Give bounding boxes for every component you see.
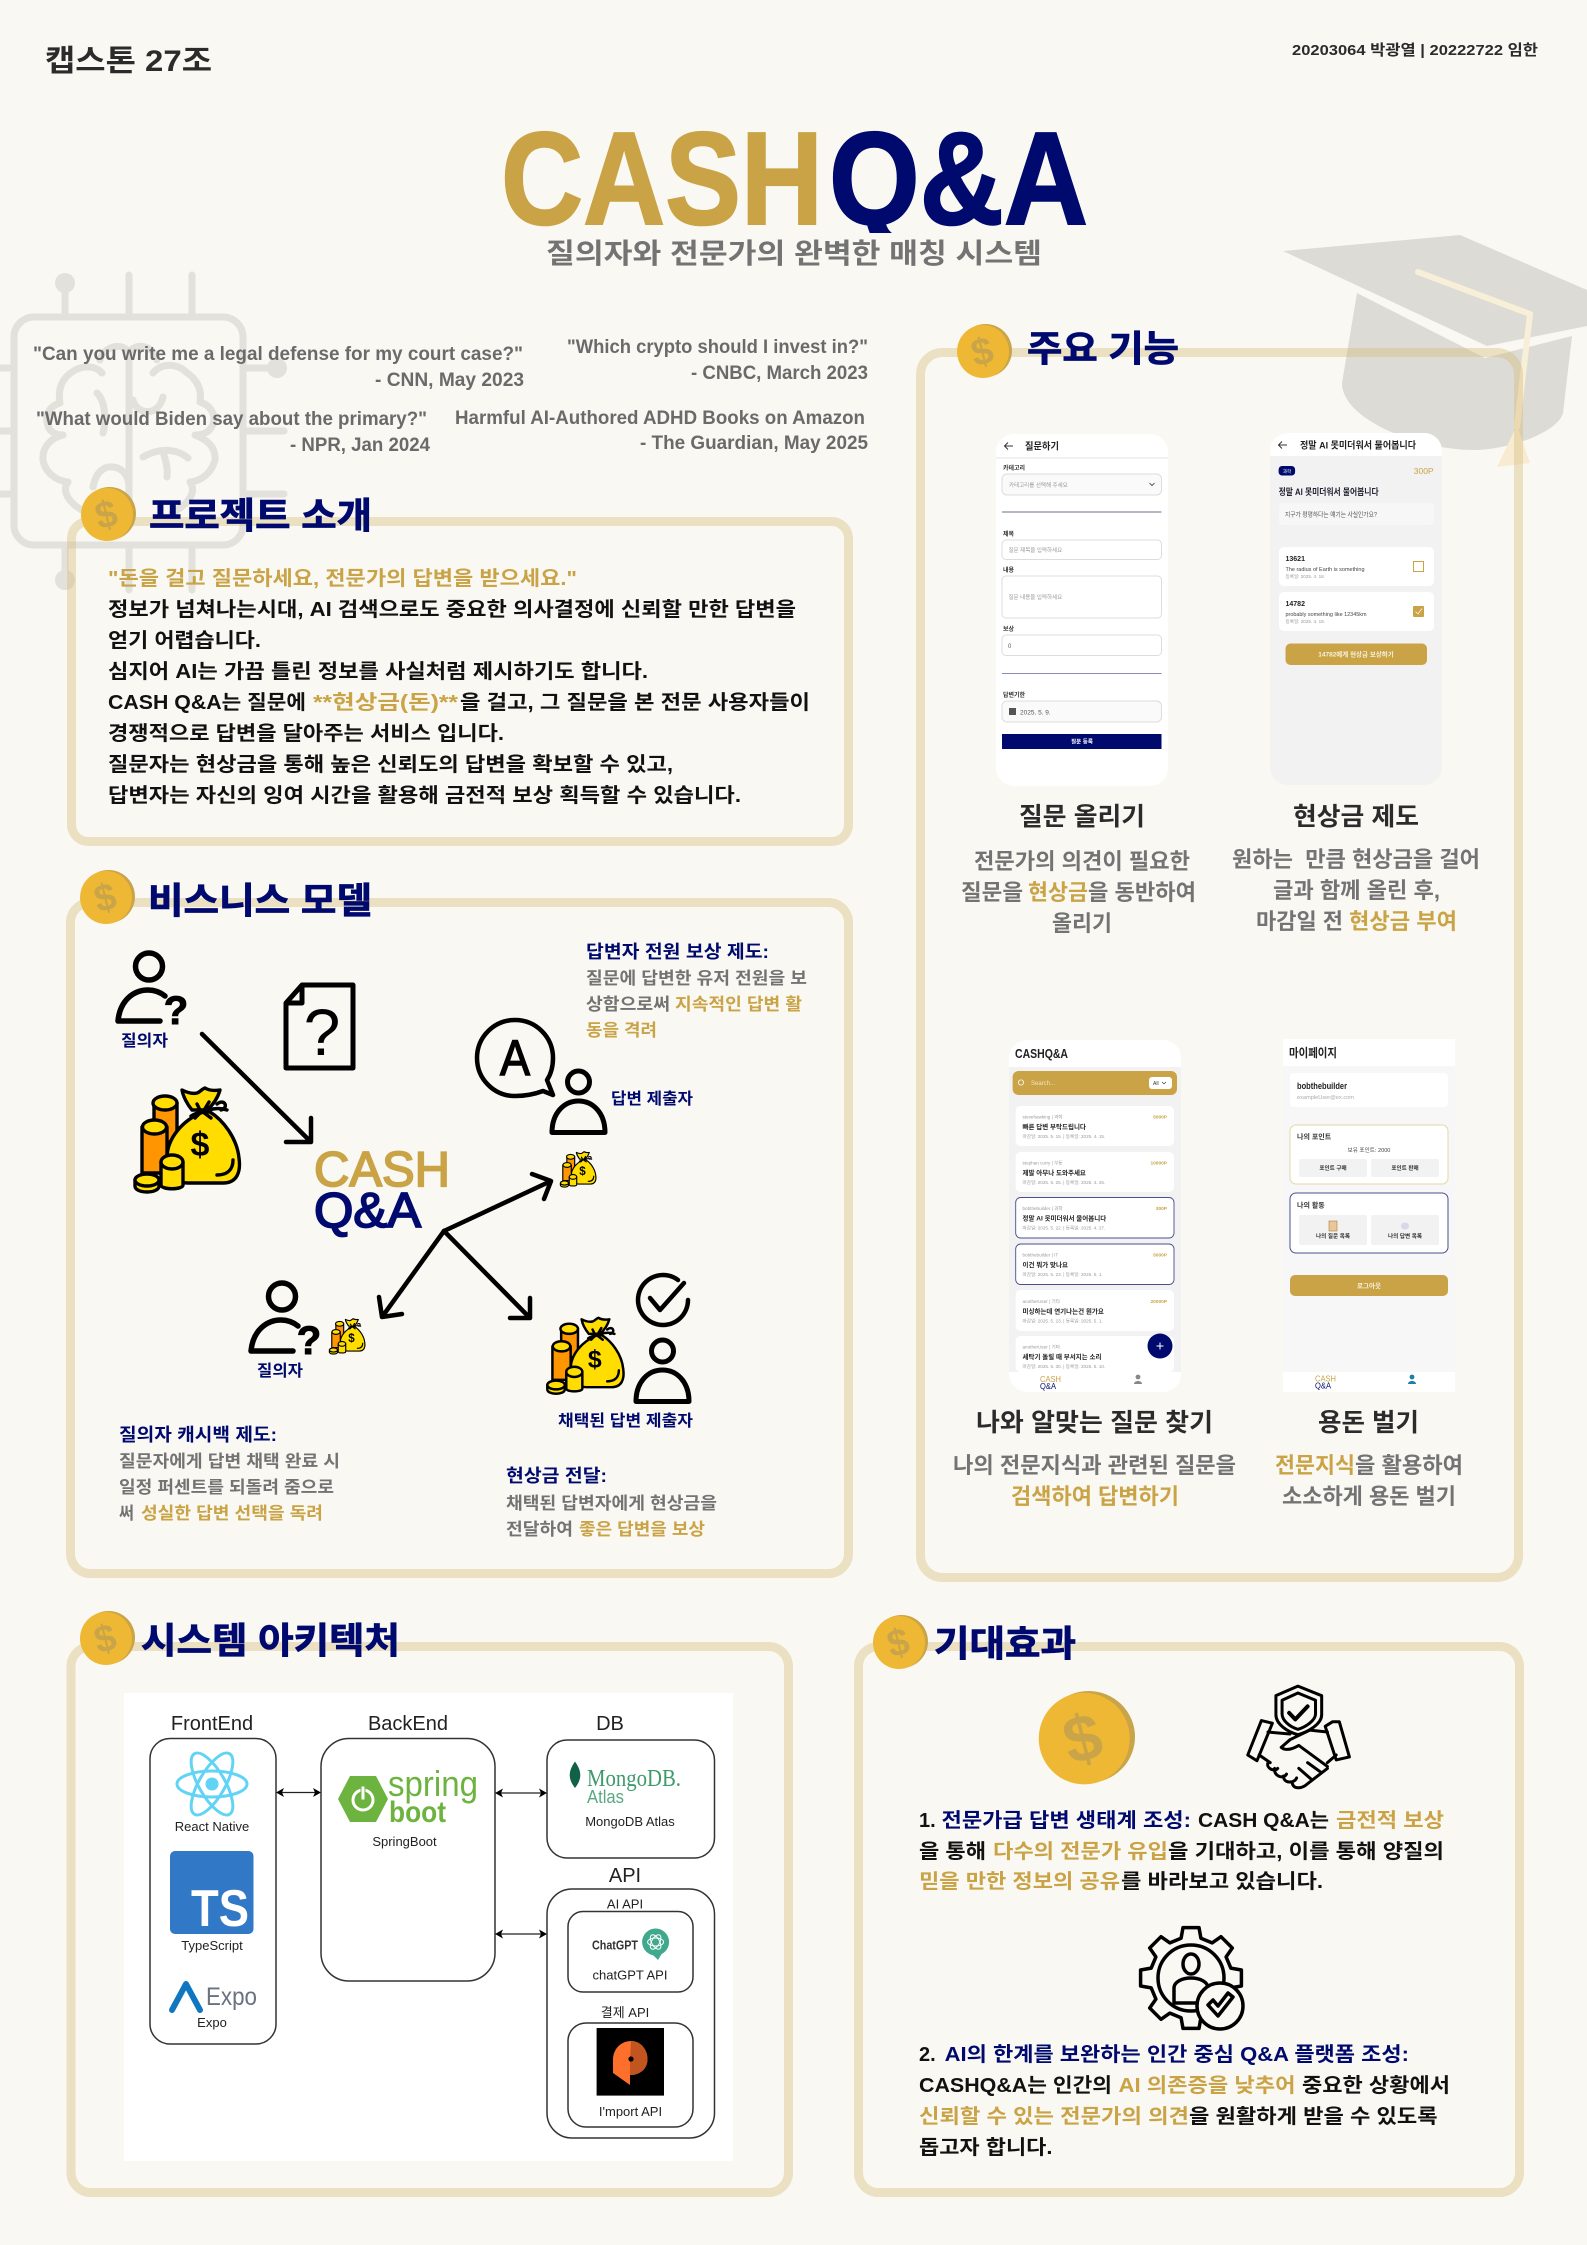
text: questioner cashback: 일정 퍼센트를 되돌려 줌으로 bbox=[119, 1478, 334, 1497]
icon: selected answer submitter: 채택된 답변 제출자 bbox=[558, 1412, 693, 1430]
text: project description: "돈을 걸고 질문하세요, 전문가의 답변을 받으세요." bbox=[108, 567, 577, 590]
panel: expected effects bbox=[858, 1615, 1520, 2192]
text: post question: 올리기 bbox=[1052, 911, 1112, 936]
screen: bounty selection: 지구가 평평하다는 얘기는 사실인가요? bbox=[1285, 510, 1377, 518]
database group: DB bbox=[596, 1713, 624, 1735]
text: reward delivery bbox=[506, 1466, 717, 1539]
screen: bounty selection: 등록일: 2025. 4. 19. bbox=[1286, 618, 1325, 625]
text: effect 1: 전문가급 답변 생태계 조성: bbox=[942, 1809, 1191, 1832]
title: CASH bbox=[501, 105, 823, 252]
text: effect 2 bbox=[919, 2043, 1450, 2159]
text: project description: **현상금(돈)** bbox=[313, 691, 458, 714]
icon: AI brain chip watermark bbox=[0, 273, 287, 590]
arrow: backend to database bbox=[495, 1788, 547, 1798]
screen: question list: 정말 AI 못미더워서 물어봅니다 bbox=[1022, 1214, 1106, 1222]
API group: ChatGPT bbox=[592, 1938, 638, 1952]
heading: expected effects bbox=[873, 1615, 1076, 1669]
heading: system architecture bbox=[80, 1611, 400, 1665]
text: questioner cashback bbox=[119, 1425, 340, 1523]
text: reward delivery: 좋은 답변을 보상 bbox=[579, 1520, 705, 1539]
icon: check mark circle bbox=[638, 1275, 688, 1325]
icon: small money bag for cashback bbox=[329, 1319, 365, 1354]
text: effect 2: 돕고자 합니다. bbox=[919, 2136, 1052, 2159]
screen: question list: 마감일: 2025. 5. 25. | 등록일: 2025. 4. 25. bbox=[1022, 1179, 1105, 1186]
screen: question list: 10000P bbox=[1150, 1160, 1168, 1166]
icon: questioner: ? bbox=[164, 989, 188, 1033]
heading: project intro: 프로젝트 소개 bbox=[149, 495, 372, 536]
API group: AI API bbox=[607, 1896, 643, 1912]
screen: bounty selection: probably something like 12345km bbox=[1286, 612, 1367, 618]
text: project description: 정보가 넘쳐나는시대, AI 검색으로도 중요한 의사결정에 신뢰할 만한 답변을 bbox=[108, 598, 796, 621]
icon: graduation cap watermark bbox=[1283, 235, 1587, 467]
text: earn pocket money: 을 활용하여 bbox=[1355, 1453, 1463, 1478]
frontend group: TS bbox=[191, 1880, 249, 1938]
heading: key features bbox=[957, 324, 1179, 378]
database group: Atlas bbox=[587, 1787, 624, 1807]
screen: my page: 보유 포인트: 2000 bbox=[1348, 1147, 1390, 1154]
text: project description: 질문자는 현상금을 통해 높은 신뢰도의 답변을 확보할 수 있고, bbox=[108, 753, 673, 776]
text: answerer full reward: 지속적인 답변 활 bbox=[675, 995, 802, 1014]
text: bounty system: 글과 함께 올린 후, bbox=[1273, 878, 1440, 903]
quote: Biden bbox=[36, 409, 430, 456]
icon: medium money bag for reward bbox=[547, 1318, 624, 1394]
text: answerer full reward bbox=[586, 942, 807, 1040]
heading: project intro bbox=[81, 487, 372, 541]
quote: crypto: - CNBC, March 2023 bbox=[691, 363, 868, 384]
screen: ask a question: 질문하기 bbox=[1025, 440, 1059, 452]
backend group: boot bbox=[389, 1796, 446, 1829]
text: answerer full reward: 동을 격려 bbox=[586, 1021, 657, 1040]
screen: my page: bobthebuilder bbox=[1297, 1081, 1347, 1091]
subtitle: 질의자와 전문가의 완벽한 매칭 시스템 bbox=[546, 238, 1042, 269]
title bbox=[504, 130, 1086, 233]
icon: medium money bag for reward: $ bbox=[588, 1346, 602, 1373]
screen: ask a question: 카테고리를 선택해 주세요 bbox=[1009, 481, 1068, 489]
text: project description: 얻기 어렵습니다. bbox=[108, 629, 261, 652]
quote: ADHD books: - The Guardian, May 2025 bbox=[640, 433, 868, 454]
arrow: platform to answerer bbox=[444, 1174, 551, 1231]
frontend group: TypeScript bbox=[181, 1938, 243, 1953]
icon: large money bag bbox=[135, 1088, 239, 1192]
screen: question list: 마감일: 2025. 5. 30. | 등록일: 2025. 5. 10. bbox=[1022, 1363, 1105, 1370]
screen: bounty selection: 13621 bbox=[1286, 556, 1305, 563]
screen: bounty selection: 14782 bbox=[1286, 601, 1305, 608]
text: effect 1 bbox=[919, 1809, 1444, 1893]
screen: ask a question: 카테고리 bbox=[1003, 464, 1025, 472]
icon: large coin bbox=[1039, 1691, 1135, 1784]
screen: ask a question: 질문 제목을 입력하세요 bbox=[1008, 546, 1062, 554]
panel: project intro bbox=[72, 487, 848, 842]
icon: answer bubble: A bbox=[500, 1030, 531, 1086]
text: find matching questions bbox=[953, 1409, 1236, 1509]
text: earn pocket money bbox=[1275, 1409, 1463, 1509]
heading: business model bbox=[80, 870, 372, 924]
text: answerer full reward: 질문에 답변한 유저 전원을 보 bbox=[586, 969, 807, 988]
screen: question list: CASH bbox=[1040, 1374, 1061, 1384]
quote: ADHD books bbox=[455, 408, 868, 454]
icon: questioner: 질의자 bbox=[121, 1032, 168, 1050]
icon: questioner cashback: 질의자 bbox=[257, 1362, 303, 1380]
heading: system architecture: $ bbox=[90, 1617, 121, 1662]
architecture diagram bbox=[124, 1693, 733, 2161]
screen: my page: 나의 활동 bbox=[1297, 1200, 1325, 1210]
quote: legal defense bbox=[33, 344, 524, 391]
text: post question bbox=[961, 803, 1196, 936]
screen: bounty selection: The radius of Earth is something bbox=[1286, 567, 1364, 573]
screen: question list: stevehawking | 과학 bbox=[1022, 1114, 1063, 1120]
screen: question list: 미싱하는데 연기나는건 뭔가요 bbox=[1022, 1306, 1104, 1316]
text: project description: 답변자는 자신의 잉여 시간을 활용해 금전적 보상 획득할 수 있습니다. bbox=[108, 784, 741, 807]
heading: key features: 주요 기능 bbox=[1027, 328, 1179, 369]
screen: question list: 마감일: 2025. 5. 23. | 등록일: 2025. 5. 1. bbox=[1022, 1271, 1103, 1278]
icon: questioner bbox=[118, 953, 188, 1050]
text: find matching questions: 나의 전문지식과 관련된 질문을 bbox=[953, 1453, 1236, 1478]
text: effect 1: 금전적 보상 bbox=[1336, 1809, 1444, 1832]
screen: question list: 이건 뭐가 맞나요 bbox=[1022, 1260, 1068, 1269]
text: questioner cashback: 질문자에게 답변 채택 완료 시 bbox=[119, 1452, 340, 1471]
screen: my page: 나의 질문 목록 bbox=[1316, 1232, 1350, 1240]
text: reward delivery: 현상금 전달: bbox=[506, 1466, 607, 1486]
text: reward delivery: 채택된 답변자에게 현상금을 bbox=[506, 1494, 717, 1513]
screen: bounty selection: 14782에게 현상금 보상하기 bbox=[1318, 650, 1394, 658]
text: effect 2: AI 의존증을 낮추어 bbox=[1118, 2074, 1296, 2097]
text: effect 1: 1. bbox=[919, 1810, 936, 1832]
screen: question list: 마감일: 2025. 5. 15. | 등록일: 2025. 4. 15. bbox=[1022, 1133, 1105, 1140]
screen: ask a question: 답변기한 bbox=[1003, 691, 1026, 699]
icon: selected answer submitter bbox=[558, 1340, 693, 1430]
panel: business model bbox=[70, 870, 848, 1574]
heading: system architecture: 시스템 아키텍처 bbox=[141, 1620, 400, 1661]
text: post question: 현상금 bbox=[1028, 880, 1088, 905]
screen: question list: 20000P bbox=[1150, 1299, 1168, 1305]
title: Q&A bbox=[829, 105, 1088, 252]
heading: key features: $ bbox=[967, 330, 998, 375]
screen: question list: Q&A bbox=[1040, 1381, 1056, 1391]
icon: answer submitter: 답변 제출자 bbox=[611, 1090, 693, 1108]
screen: my page: Q&A bbox=[1315, 1380, 1331, 1390]
screen: bounty selection: 정말 AI 못미더워서 물어봅니다 bbox=[1279, 486, 1379, 497]
frontend group: Expo bbox=[197, 2015, 227, 2030]
screen: my page: 포인트 판매 bbox=[1391, 1164, 1419, 1172]
database group: MongoDB Atlas bbox=[585, 1814, 675, 1829]
screen: question list: Search... bbox=[1031, 1081, 1055, 1087]
screen: my page: 나의 답변 목록 bbox=[1388, 1232, 1422, 1240]
icon: questioner cashback bbox=[251, 1283, 321, 1380]
icon: question document bbox=[286, 985, 353, 1069]
text: project description: 을 걸고, 그 질문을 본 전문 사용자들이 bbox=[460, 691, 810, 714]
screen: my page: 마이페이지 bbox=[1289, 1046, 1337, 1060]
screen: question list: 300P bbox=[1156, 1206, 1168, 1212]
text: answerer full reward: 상함으로써 bbox=[586, 995, 670, 1014]
text: effect 1: 를 바라보고 있습니다. bbox=[1121, 1870, 1323, 1893]
quote: Biden: - NPR, Jan 2024 bbox=[290, 435, 430, 456]
text: effect 2: CASHQ&A는 인간의 bbox=[919, 2074, 1112, 2097]
backend group: BackEnd bbox=[368, 1713, 448, 1735]
text: earn pocket money: 소소하게 용돈 벌기 bbox=[1282, 1484, 1456, 1509]
text: effect 2: 2. bbox=[919, 2044, 936, 2066]
text: effect 1: 을 기대하고, 이를 통해 양질의 bbox=[1168, 1840, 1444, 1863]
screen: question list: bobthebuilder | IT bbox=[1022, 1252, 1058, 1258]
text: bounty system bbox=[1232, 803, 1480, 934]
text: effect 1: CASH Q&A는 bbox=[1198, 1810, 1329, 1832]
frontend group: FrontEnd bbox=[171, 1713, 253, 1735]
text: effect 1: 을 통해 bbox=[919, 1840, 986, 1863]
text: post question: 질문을 bbox=[961, 880, 1023, 905]
text: reward delivery: 전달하여 bbox=[506, 1520, 573, 1539]
heading: expected effects: 기대효과 bbox=[934, 1623, 1076, 1664]
database group bbox=[547, 1713, 714, 1858]
text: post question: 질문 올리기 bbox=[1019, 803, 1145, 831]
text: bounty system: 마감일 전 bbox=[1256, 909, 1343, 934]
text: earn pocket money: 용돈 벌기 bbox=[1318, 1409, 1419, 1437]
header: team name: 캡스톤 27조 bbox=[45, 45, 212, 78]
screen: question list: stephan curry | 부동 bbox=[1022, 1160, 1063, 1166]
quote: legal defense: "Can you write me a legal defense for my court case?" bbox=[33, 344, 523, 365]
heading: business model: 비스니스 모델 bbox=[148, 880, 372, 921]
icon: small money bag for answerers: $ bbox=[579, 1166, 586, 1178]
text: answerer full reward: 답변자 전원 보상 제도: bbox=[586, 942, 769, 962]
text: effect 1: 믿을 만한 정보의 공유 bbox=[919, 1870, 1120, 1893]
screen: question list: 제발 아무나 도와주세요 bbox=[1022, 1168, 1086, 1177]
screen: question list: All bbox=[1153, 1081, 1159, 1087]
screen: question list: 마감일: 2025. 5. 22. | 등록일: 2025. 4. 27. bbox=[1022, 1224, 1105, 1232]
heading: project intro: $ bbox=[91, 493, 122, 538]
quote: crypto: "Which crypto should I invest in?" bbox=[567, 337, 868, 358]
text: effect 2: 신뢰할 수 있는 전문가의 의견 bbox=[919, 2105, 1189, 2128]
screen: bounty selection: 등록일: 2025. 4. 18. bbox=[1286, 573, 1325, 580]
text: project description: 심지어 AI는 가끔 틀린 정보를 사실처럼 제시하기도 합니다. bbox=[108, 660, 648, 683]
screen: my page: 로그아웃 bbox=[1357, 1281, 1381, 1290]
text: bounty system: 현상금 제도 bbox=[1293, 803, 1419, 831]
screen: ask a question: 0 bbox=[1008, 644, 1012, 650]
screen: question list: CASHQ&A bbox=[1015, 1046, 1068, 1061]
API group: chatGPT API bbox=[593, 1968, 667, 1982]
icon: small money bag for answerers bbox=[560, 1152, 596, 1187]
screen: my page: 포인트 구매 bbox=[1319, 1164, 1347, 1172]
text: questioner cashback: 성실한 답변 선택을 독려 bbox=[141, 1504, 323, 1523]
API group: API bbox=[609, 1865, 641, 1887]
panel: key features bbox=[920, 324, 1518, 1578]
logo: CASH Q&A: CASH bbox=[314, 1143, 450, 1197]
screen: ask a question bbox=[996, 434, 1168, 786]
screen: ask a question: 보상 bbox=[1003, 625, 1015, 633]
screen: question list: anotherUser | 기타 bbox=[1022, 1344, 1061, 1350]
screen: my page bbox=[1283, 1039, 1455, 1392]
arrow: backend to API bbox=[495, 1930, 547, 1938]
text: bounty system: 현상금 부여 bbox=[1349, 909, 1457, 934]
screen: ask a question: 내용 bbox=[1003, 566, 1015, 574]
quote: legal defense: - CNN, May 2023 bbox=[375, 370, 524, 391]
logo: CASH Q&A bbox=[314, 1143, 450, 1238]
arrow: platform to selected answerer bbox=[444, 1231, 530, 1318]
text: bounty system: 원하는 만큼 현상금을 걸어 bbox=[1232, 847, 1480, 872]
screen: question list: bobthebuilder | 과학 bbox=[1022, 1205, 1063, 1212]
frontend group: React Native bbox=[175, 1819, 249, 1834]
screen: question list: 빠른 답변 부탁드립니다 bbox=[1022, 1122, 1086, 1131]
API group bbox=[547, 1865, 714, 2138]
text: effect 2: 을 원활하게 받을 수 있도록 bbox=[1189, 2105, 1438, 2128]
text: project description bbox=[108, 567, 810, 807]
heading: expected effects: $ bbox=[883, 1621, 914, 1666]
screen: question list: 마감일: 2025. 5. 23. | 등록일: 2025. 5. 1. bbox=[1022, 1318, 1103, 1324]
screen: bounty selection bbox=[1270, 433, 1442, 785]
screen: bounty selection: 300P bbox=[1414, 466, 1434, 476]
screen: my page: exampleUser@ex.com bbox=[1297, 1095, 1354, 1101]
icon: small money bag for cashback: $ bbox=[348, 1333, 355, 1345]
quote: ADHD books: Harmful AI-Authored ADHD Books on Amazon bbox=[455, 408, 865, 429]
heading: business model: $ bbox=[90, 876, 121, 921]
screen: question list bbox=[1009, 1040, 1181, 1392]
backend group: spring bbox=[388, 1763, 478, 1804]
text: effect 1: 다수의 전문가 유입 bbox=[993, 1840, 1168, 1863]
quote: crypto bbox=[567, 337, 868, 384]
arrow: questioner to platform bbox=[202, 1034, 311, 1142]
text: project description: CASH Q&A는 질문에 bbox=[108, 691, 306, 714]
backend group: SpringBoot bbox=[372, 1834, 437, 1849]
quote: Biden: "What would Biden say about the primary?" bbox=[36, 409, 427, 430]
text: questioner cashback: 써 bbox=[119, 1504, 134, 1523]
icon: gear with person bbox=[1141, 1928, 1243, 2029]
text: effect 2: AI의 한계를 보완하는 인간 중심 Q&A 플랫폼 조성: bbox=[945, 2043, 1409, 2066]
text: find matching questions: 검색하여 답변하기 bbox=[1011, 1484, 1179, 1509]
backend group bbox=[321, 1713, 495, 1981]
screen: bounty selection: 정말 AI 못미더워서 물어봅니다 bbox=[1300, 440, 1416, 452]
text: effect 2: 중요한 상황에서 bbox=[1302, 2074, 1450, 2097]
text: project description: 경쟁적으로 답변을 달아주는 서비스 입니다. bbox=[108, 722, 504, 745]
text: post question: 을 동반하여 bbox=[1088, 880, 1196, 905]
text: find matching questions: 나와 알맞는 질문 찾기 bbox=[976, 1409, 1213, 1437]
icon: answer submitter bbox=[552, 1071, 693, 1132]
frontend group: Expo bbox=[206, 1983, 257, 2011]
icon: large coin: $ bbox=[1056, 1699, 1110, 1779]
API group: I'mport API bbox=[599, 2104, 662, 2119]
screen: question list: anotherUser | 기타 bbox=[1022, 1298, 1061, 1305]
database group: MongoDB. bbox=[587, 1766, 681, 1792]
screen: question list: 5000P bbox=[1153, 1252, 1168, 1258]
screen: my page: CASH bbox=[1315, 1374, 1336, 1384]
screen: bounty selection: 과학 bbox=[1283, 468, 1291, 475]
icon: questioner cashback: ? bbox=[297, 1319, 321, 1363]
icon: large money bag: $ bbox=[191, 1126, 210, 1164]
frontend group bbox=[150, 1713, 276, 2044]
screen: question list: 5000P bbox=[1153, 1114, 1168, 1120]
text: earn pocket money: 전문지식 bbox=[1275, 1453, 1355, 1478]
API group: 결제 API bbox=[601, 2005, 649, 2020]
panel: system architecture bbox=[71, 1611, 788, 2192]
icon: answer bubble bbox=[477, 1020, 553, 1096]
screen: ask a question: 질문 내용을 입력하세요 bbox=[1008, 593, 1062, 601]
screen: ask a question: 2025. 5. 9. bbox=[1020, 710, 1051, 716]
text: post question: 전문가의 의견이 필요한 bbox=[974, 849, 1190, 874]
screen: question list: 세탁기 돌릴 때 부서지는 소리 bbox=[1022, 1352, 1102, 1361]
screen: ask a question: 제목 bbox=[1003, 530, 1015, 538]
arrow: platform to questioner bbox=[379, 1231, 444, 1317]
screen: ask a question: 질문 등록 bbox=[1071, 738, 1093, 746]
icon: question document: ? bbox=[304, 995, 340, 1069]
text: questioner cashback: 질의자 캐시백 제도: bbox=[119, 1425, 277, 1445]
icon: handshake with shield bbox=[1248, 1686, 1349, 1788]
header: student ids: 20203064 박광열 | 20222722 임한 bbox=[1292, 42, 1538, 59]
logo: CASH Q&A: Q&A bbox=[314, 1184, 421, 1238]
arrow: frontend to backend bbox=[276, 1788, 321, 1797]
screen: my page: 나의 포인트 bbox=[1297, 1132, 1332, 1141]
